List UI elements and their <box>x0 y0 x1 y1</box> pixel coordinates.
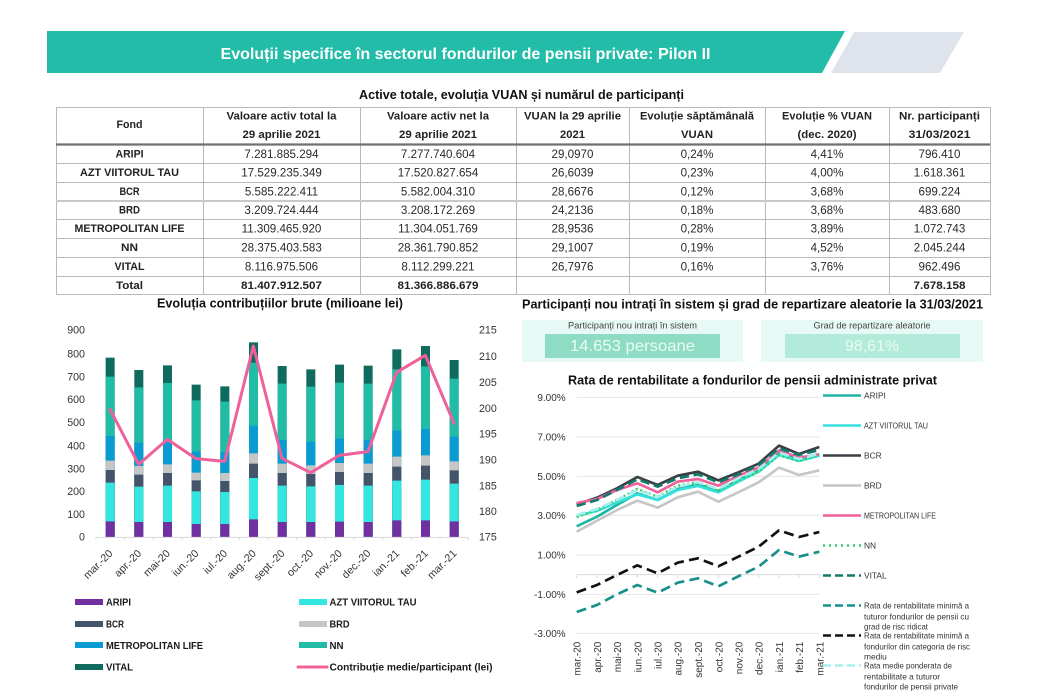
contributions chart legend: BRD <box>330 620 350 630</box>
contributions chart heading: Evoluția contribuțiilor brute (milioane lei) <box>157 296 403 310</box>
month axis labels: iun.-20 <box>170 548 201 579</box>
right axis labels: 185 <box>479 480 497 492</box>
average contribution line <box>110 346 454 473</box>
month axis labels: iul.-20 <box>201 548 230 577</box>
left axis labels: 700 <box>67 371 85 383</box>
rate of return legend: NN <box>864 540 876 550</box>
left axis labels: 200 <box>67 486 85 498</box>
rate of return legend: Rata de rentabilitate minimă a <box>864 600 969 610</box>
rate of return legend: ARIPI <box>864 390 886 400</box>
KPI panel: new participants: 14.653 persoane <box>570 338 695 355</box>
row: BRD: 483.680 <box>919 204 960 217</box>
row: NN: 0,19% <box>681 242 713 254</box>
percent axis labels: 3.00% <box>537 511 566 522</box>
left axis labels: 400 <box>67 440 85 452</box>
table header row: 29 aprilie 2021 <box>242 129 320 141</box>
month axis labels: nov.-20 <box>734 641 745 674</box>
row: BCR: 3,68% <box>811 186 843 198</box>
row: AZT VIITORUL TAU: 17.520.827.654 <box>398 166 479 180</box>
table header row: VUAN <box>681 129 713 141</box>
contributions chart legend: BCR <box>106 620 124 630</box>
contributions chart legend: AZT VIITORUL TAU <box>330 598 416 608</box>
rate of return legend: Rata medie ponderata de <box>864 660 952 670</box>
row: NN: 28.361.790.852 <box>398 242 478 254</box>
row: AZT VIITORUL TAU: AZT VIITORUL TAU <box>80 167 179 179</box>
right axis labels: 175 <box>479 532 497 544</box>
month axis labels: apr.-20 <box>593 641 604 673</box>
row: ARIPI <box>116 148 960 161</box>
row: NN: 29,1007 <box>552 242 593 254</box>
row: Total: 7.678.158 <box>914 280 966 292</box>
row: Total: Total <box>116 280 143 292</box>
row: VITAL: VITAL <box>114 261 145 273</box>
rate of return legend <box>823 390 970 692</box>
month axis labels: mai-20 <box>613 641 624 672</box>
row: VITAL: 8.112.299.221 <box>401 260 475 274</box>
row: BCR <box>120 186 961 198</box>
row: VITAL <box>114 260 960 274</box>
series lines <box>577 446 819 612</box>
participants section heading: Participanți nou intrați în sistem și grad de repartizare aleatorie la 31/03/2021 <box>522 298 983 312</box>
row: BRD: 3.208.172.269 <box>401 204 475 217</box>
row: AZT VIITORUL TAU: 26,6039 <box>552 166 593 180</box>
row: BCR: BCR <box>120 186 140 198</box>
right axis labels: 215 <box>479 325 497 337</box>
rate of return legend: METROPOLITAN LIFE <box>864 510 936 520</box>
contributions chart legend: VITAL <box>106 662 134 674</box>
month axis labels: mai-20 <box>141 548 173 579</box>
table header row <box>116 110 980 141</box>
month axis labels: dec.-20 <box>340 548 374 581</box>
left axis labels: 0 <box>79 532 85 544</box>
left axis labels: 300 <box>67 463 85 475</box>
left axis labels: 600 <box>67 394 85 406</box>
percent axis labels: 5.00% <box>537 472 566 483</box>
row: ARIPI: 4,41% <box>811 148 843 161</box>
month axis labels: mar.-21 <box>425 548 459 582</box>
month axis labels: dec.-20 <box>755 641 766 675</box>
right axis labels: 205 <box>479 377 497 389</box>
left axis labels: 900 <box>67 325 85 337</box>
row: NN: 28.375.403.583 <box>241 242 322 254</box>
row: NN <box>121 242 966 254</box>
KPI panel: random allocation rate: Grad de repartizare aleatorie <box>814 320 930 330</box>
month axis labels: aug.-20 <box>674 641 685 676</box>
row: BRD: BRD <box>119 204 140 216</box>
row: BRD: 3,68% <box>811 204 843 217</box>
row: AZT VIITORUL TAU <box>80 166 965 180</box>
row: Total: 81.366.886.679 <box>398 280 478 292</box>
row: METROPOLITAN LIFE <box>74 222 965 236</box>
table header row: Evoluție % VUAN <box>782 110 872 122</box>
row: BCR: 699.224 <box>919 186 961 198</box>
table heading: Active totale, evoluția VUAN și numărul de participanți <box>359 88 684 102</box>
month axis labels: mar.-21 <box>815 641 826 676</box>
rate of return legend: fondurilor de pensii private <box>864 682 958 692</box>
month axis labels: mar.-20 <box>573 641 584 676</box>
row: Total: 81.407.912.507 <box>241 280 322 292</box>
left axis labels: 500 <box>67 417 85 429</box>
row: VITAL: 26,7976 <box>552 260 593 274</box>
row: AZT VIITORUL TAU: 4,00% <box>811 166 843 180</box>
month axis labels: aug.-20 <box>225 548 259 582</box>
row: METROPOLITAN LIFE: 11.304.051.769 <box>398 222 478 236</box>
row: BRD: 0,18% <box>681 204 713 217</box>
month axis labels: sept.-20 <box>252 548 287 583</box>
percent axis labels: 7.00% <box>537 433 566 444</box>
right axis labels: 180 <box>479 506 497 518</box>
month axis labels: iul.-20 <box>654 641 665 669</box>
row: BRD: 24,2136 <box>552 204 593 217</box>
row: VITAL: 8.116.975.506 <box>245 260 318 274</box>
rate of return legend: fondurilor din categoria de risc <box>864 642 970 652</box>
month axis labels <box>573 641 826 678</box>
right axis labels: 190 <box>479 454 497 466</box>
rate of return legend: Rata de rentabilitate minimă a <box>864 630 969 640</box>
row: NN: 2.045.244 <box>914 242 966 254</box>
rate of return legend: grad de risc ridicat <box>864 622 929 632</box>
month axis labels: nov.-20 <box>312 548 345 581</box>
row: BCR: 28,6676 <box>552 186 593 198</box>
rate of return legend: rentabilitate a tuturor <box>864 672 940 682</box>
table header row: VUAN la 29 aprilie <box>524 110 621 122</box>
percent axis labels: 1.00% <box>537 551 566 562</box>
row: METROPOLITAN LIFE: 11.309.465.920 <box>242 222 321 236</box>
percent axis labels: -3.00% <box>534 629 566 640</box>
row: METROPOLITAN LIFE: METROPOLITAN LIFE <box>74 223 184 235</box>
rate of return legend: VITAL <box>864 570 887 580</box>
page title: Evoluții specifice în sectorul fondurilor de pensii private: Pilon II <box>220 46 710 63</box>
rate of return legend: BCR <box>864 450 882 460</box>
contributions bar and line chart <box>67 325 497 583</box>
month axis labels: sept.-20 <box>694 641 705 678</box>
table header row: Nr. participanți <box>899 110 980 122</box>
table header row: 2021 <box>560 129 585 141</box>
contributions chart legend: NN <box>330 641 344 652</box>
contributions chart legend <box>75 598 492 674</box>
row: BCR: 5.582.004.310 <box>401 186 475 198</box>
rate of return legend: BRD <box>864 480 882 490</box>
row: ARIPI: 0,24% <box>681 148 713 161</box>
header banner <box>47 31 964 73</box>
row: BRD <box>119 204 960 217</box>
row: AZT VIITORUL TAU: 1.618.361 <box>914 166 965 180</box>
KPI panel: random allocation rate: 98,61% <box>845 338 899 355</box>
row: AZT VIITORUL TAU: 17.529.235.349 <box>241 166 322 180</box>
rate of return legend: mediu <box>864 652 887 662</box>
percent axis labels <box>534 393 566 640</box>
row: VITAL: 0,16% <box>681 260 713 274</box>
row: ARIPI: 7.277.740.604 <box>401 148 476 161</box>
row: NN: 4,52% <box>811 242 843 254</box>
contributions chart legend: Contribuție medie/participant (lei) <box>330 662 492 674</box>
contributions chart legend: METROPOLITAN LIFE <box>106 641 203 652</box>
KPI panel: new participants <box>522 320 743 362</box>
right axis labels: 200 <box>479 403 497 415</box>
KPI panel: new participants: Participanți nou intrați în sistem <box>568 320 697 330</box>
row: BRD: 3.209.724.444 <box>244 204 319 217</box>
row: ARIPI: 7.281.885.294 <box>244 148 319 161</box>
month axis labels: feb.-21 <box>399 548 431 580</box>
right axis labels <box>479 325 497 544</box>
contributions chart legend: ARIPI <box>106 598 131 608</box>
left axis labels: 100 <box>67 509 85 521</box>
row: ARIPI: 796.410 <box>919 148 960 161</box>
row: AZT VIITORUL TAU: 0,23% <box>681 166 713 180</box>
percent axis labels: -1.00% <box>534 590 566 601</box>
month axis labels: oct.-20 <box>714 641 725 672</box>
data table <box>56 107 990 295</box>
rate of return legend: AZT VIITORUL TAU <box>864 420 928 430</box>
month axis labels: iun.-20 <box>633 641 644 672</box>
row: NN: NN <box>121 242 138 254</box>
month axis labels: mar.-20 <box>81 548 115 582</box>
table header row: Valoare activ total la <box>226 110 337 122</box>
row: VITAL: 962.496 <box>919 260 960 274</box>
row: METROPOLITAN LIFE: 0,28% <box>681 222 713 236</box>
rate of return chart heading: Rata de rentabilitate a fondurilor de pensii administrate privat <box>568 374 938 388</box>
right axis labels: 195 <box>479 429 497 441</box>
rate of return line chart <box>534 393 826 678</box>
table header row: (dec. 2020) <box>798 129 857 141</box>
percent axis labels: 9.00% <box>537 393 566 404</box>
month axis labels: feb.-21 <box>795 641 806 673</box>
right axis labels: 210 <box>479 351 497 363</box>
stacked bars <box>110 342 454 537</box>
row: VITAL: 3,76% <box>811 260 843 274</box>
KPI panel: random allocation rate <box>761 320 983 362</box>
row: METROPOLITAN LIFE: 3,89% <box>811 222 843 236</box>
row: ARIPI: 29,0970 <box>552 148 593 161</box>
month axis labels: ian.-21 <box>371 548 402 579</box>
table header row: 29 aprilie 2021 <box>399 129 477 141</box>
rate of return legend: tuturor fondurilor de pensii cu <box>864 612 969 622</box>
table header row: Evoluție săptămânală <box>640 110 755 122</box>
month axis labels: ian.-21 <box>775 641 786 672</box>
table header row: Fond <box>116 119 142 131</box>
row: BCR: 5.585.222.411 <box>245 186 318 198</box>
month axis labels: oct.-20 <box>285 548 316 579</box>
row: ARIPI: ARIPI <box>116 148 144 160</box>
table header row: 31/03/2021 <box>908 129 970 141</box>
table header row: Valoare activ net la <box>387 110 490 122</box>
month axis labels <box>81 548 459 583</box>
row: METROPOLITAN LIFE: 1.072.743 <box>914 222 965 236</box>
left axis labels <box>67 325 85 544</box>
row: Total <box>116 280 966 292</box>
month axis labels: apr.-20 <box>112 548 144 580</box>
left axis labels: 800 <box>67 348 85 360</box>
row: BCR: 0,12% <box>681 186 713 198</box>
row: METROPOLITAN LIFE: 28,9536 <box>552 222 593 236</box>
